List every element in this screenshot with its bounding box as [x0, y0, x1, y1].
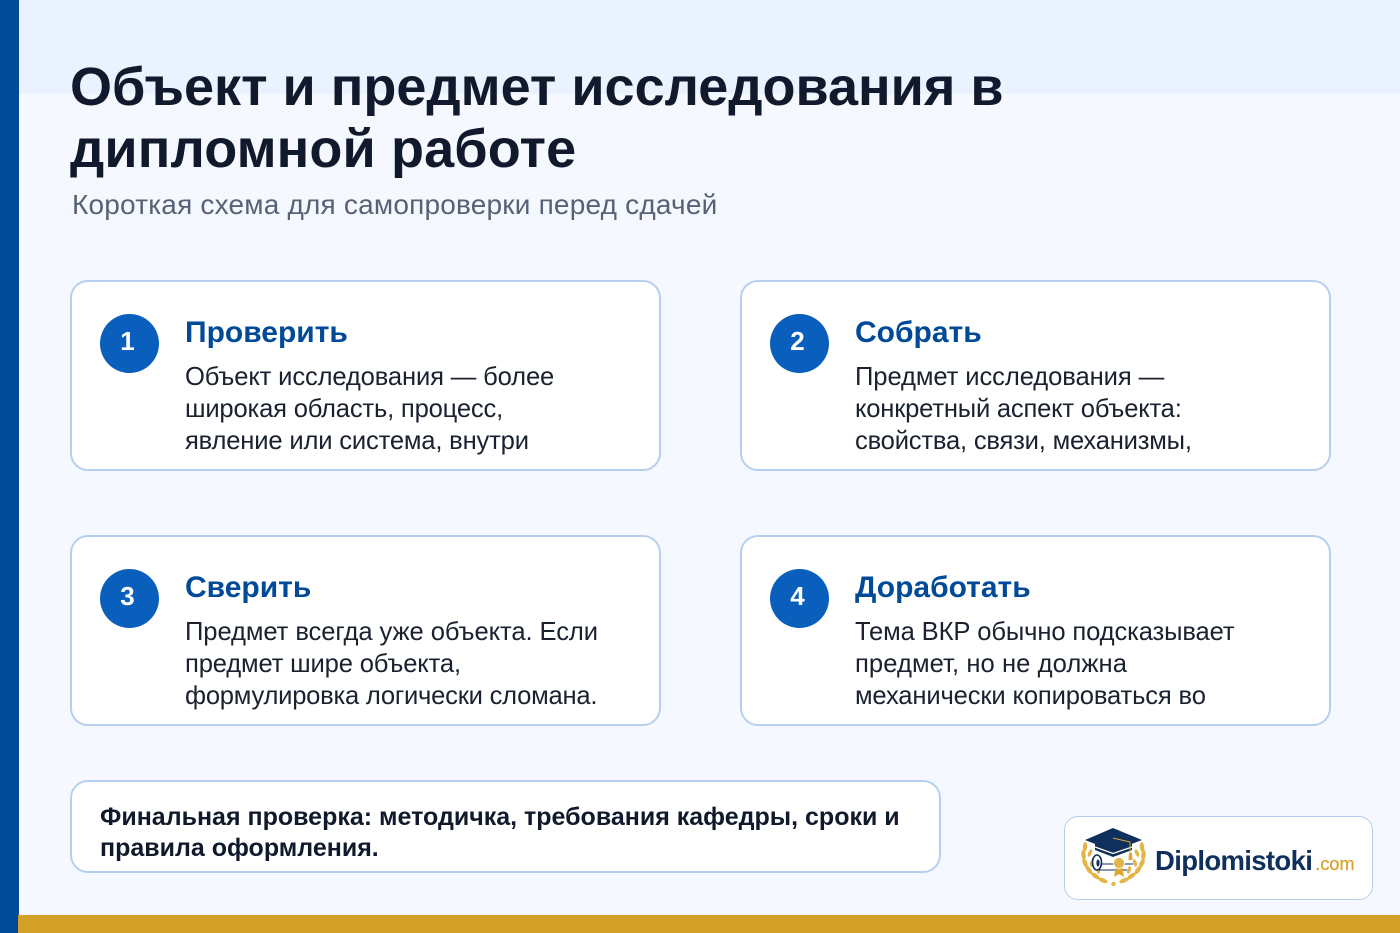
- bottom gold bar: [18, 915, 1400, 933]
- step 3 heading: Сверить: [185, 571, 311, 604]
- panel: step 1: [70, 280, 661, 471]
- title: дипломной работе: [70, 119, 576, 179]
- step 2 text: конкретный аспект объекта:: [855, 395, 1182, 423]
- step 2 text: [855, 363, 1192, 455]
- step 2 number: 2: [790, 326, 805, 356]
- step 4 text: механически копироваться во: [855, 682, 1206, 710]
- step 4 number: 4: [790, 581, 805, 611]
- step 3 number: 3: [120, 581, 135, 611]
- step 1 text: Объект исследования — более: [185, 363, 554, 391]
- step 4 heading: Доработать: [855, 571, 1031, 604]
- panel: step 2: [740, 280, 1331, 471]
- left accent bar: [0, 0, 19, 933]
- panel: step 3: [70, 535, 661, 726]
- step 1 text: широкая область, процесс,: [185, 395, 503, 423]
- step 3 text: Предмет всегда уже объекта. Если: [185, 618, 598, 646]
- step 4 text: предмет, но не должна: [855, 650, 1127, 678]
- subtitle: Короткая схема для самопроверки перед сдачей: [72, 189, 717, 220]
- callout: final check: правила оформления.: [100, 834, 379, 862]
- step 1 number: 1: [120, 326, 135, 356]
- step 3 text: [185, 618, 598, 710]
- callout: final check: Финальная проверка: методичка, требования кафедры, сроки и: [100, 803, 900, 831]
- logo wordmark: Diplomistoki.com: [1155, 845, 1355, 876]
- step 1 heading: Проверить: [185, 316, 348, 349]
- step 1 number: [100, 314, 159, 373]
- step 2 text: Предмет исследования —: [855, 363, 1164, 391]
- top header band: [18, 0, 1400, 94]
- step 2 text: свойства, связи, механизмы,: [855, 427, 1192, 455]
- step 3 text: предмет шире объекта,: [185, 650, 461, 678]
- title: [70, 57, 1004, 179]
- step 1 text: явление или система, внутри: [185, 427, 529, 455]
- title: Объект и предмет исследования в: [70, 57, 1004, 117]
- step 3 text: формулировка логически сломана.: [185, 682, 597, 710]
- step 2 number: [770, 314, 829, 373]
- panel: step 4: [740, 535, 1331, 726]
- logo card: [1064, 816, 1373, 900]
- step 4 text: Тема ВКР обычно подсказывает: [855, 618, 1234, 646]
- step 4 text: [855, 618, 1234, 710]
- step 2 heading: Собрать: [855, 316, 982, 349]
- icon: graduation cap with laurel: [1081, 828, 1146, 886]
- step 3 number: [100, 569, 159, 628]
- step 1 text: [185, 363, 554, 455]
- callout: final check: [70, 780, 941, 873]
- step 4 number: [770, 569, 829, 628]
